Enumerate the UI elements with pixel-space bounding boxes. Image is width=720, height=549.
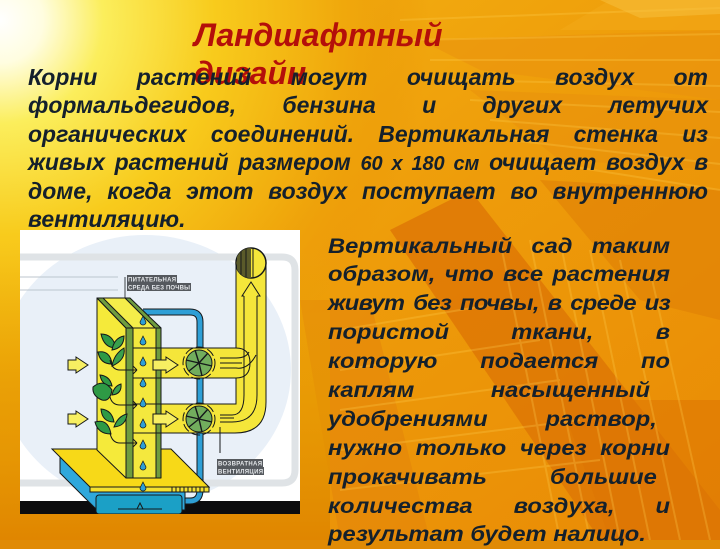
text block: roots clean the air: живых растений размером 60 х 180 см очищает воздух в (28, 149, 708, 175)
text block: vertical garden: пористой ткани, в (328, 321, 670, 344)
label: nutrient medium: ПИТАТЕЛЬНАЯ (128, 278, 176, 284)
text block: vertical garden: каплям насыщенный (328, 379, 650, 402)
text block: vertical garden: нужно только через корни (328, 437, 670, 460)
text block: roots clean the air: органических соединений. Вертикальная стенка из (28, 121, 708, 147)
tank (60, 455, 185, 510)
text block: vertical garden: живут без почвы, в среде из (328, 292, 670, 315)
label: return ventilation: ВОЗВРАТНАЯ (218, 462, 262, 468)
ducts (161, 263, 266, 433)
fan upper (183, 347, 215, 379)
text block: vertical garden: количества воздуха, и (328, 495, 670, 518)
text block: roots clean the air (27, 64, 709, 232)
text block: vertical garden: результат будет налицо. (328, 523, 646, 546)
wall (97, 298, 161, 478)
water drops (140, 316, 146, 491)
text block: roots clean the air: вентиляцию. (28, 206, 186, 232)
text block: vertical garden: удобрениями раствор, (328, 408, 657, 431)
airflow arrows (68, 357, 178, 427)
text block: vertical garden: которую подается по (328, 350, 670, 373)
text block: roots clean the air: Корни растений могут очищать воздух от (28, 64, 708, 90)
text block: vertical garden: прокачивать большие (328, 466, 657, 489)
text block: roots clean the air: формальдегидов, бензина и других летучих (28, 92, 708, 118)
tray (52, 449, 209, 487)
text block: vertical garden: образом, что все растения (328, 263, 670, 286)
label: return ventilation: ВЕНТИЛЯЦИЯ (218, 470, 263, 476)
title: Ландшафтный дизайн (194, 17, 442, 91)
fan lower (183, 403, 215, 435)
label: nutrient medium (127, 275, 191, 292)
water pipe (143, 312, 200, 501)
text block: roots clean the air: доме, когда этот воздух поступает во внутреннюю (28, 178, 708, 204)
label: nutrient medium: СРЕДА БЕЗ ПОЧВЫ (128, 286, 190, 292)
text block: vertical garden: Вертикальный сад таким (328, 235, 670, 258)
exhaust opening (236, 248, 266, 278)
diagram: vertical garden ventilation scheme (20, 230, 300, 514)
label: return ventilation (217, 459, 264, 476)
plants (93, 334, 127, 434)
